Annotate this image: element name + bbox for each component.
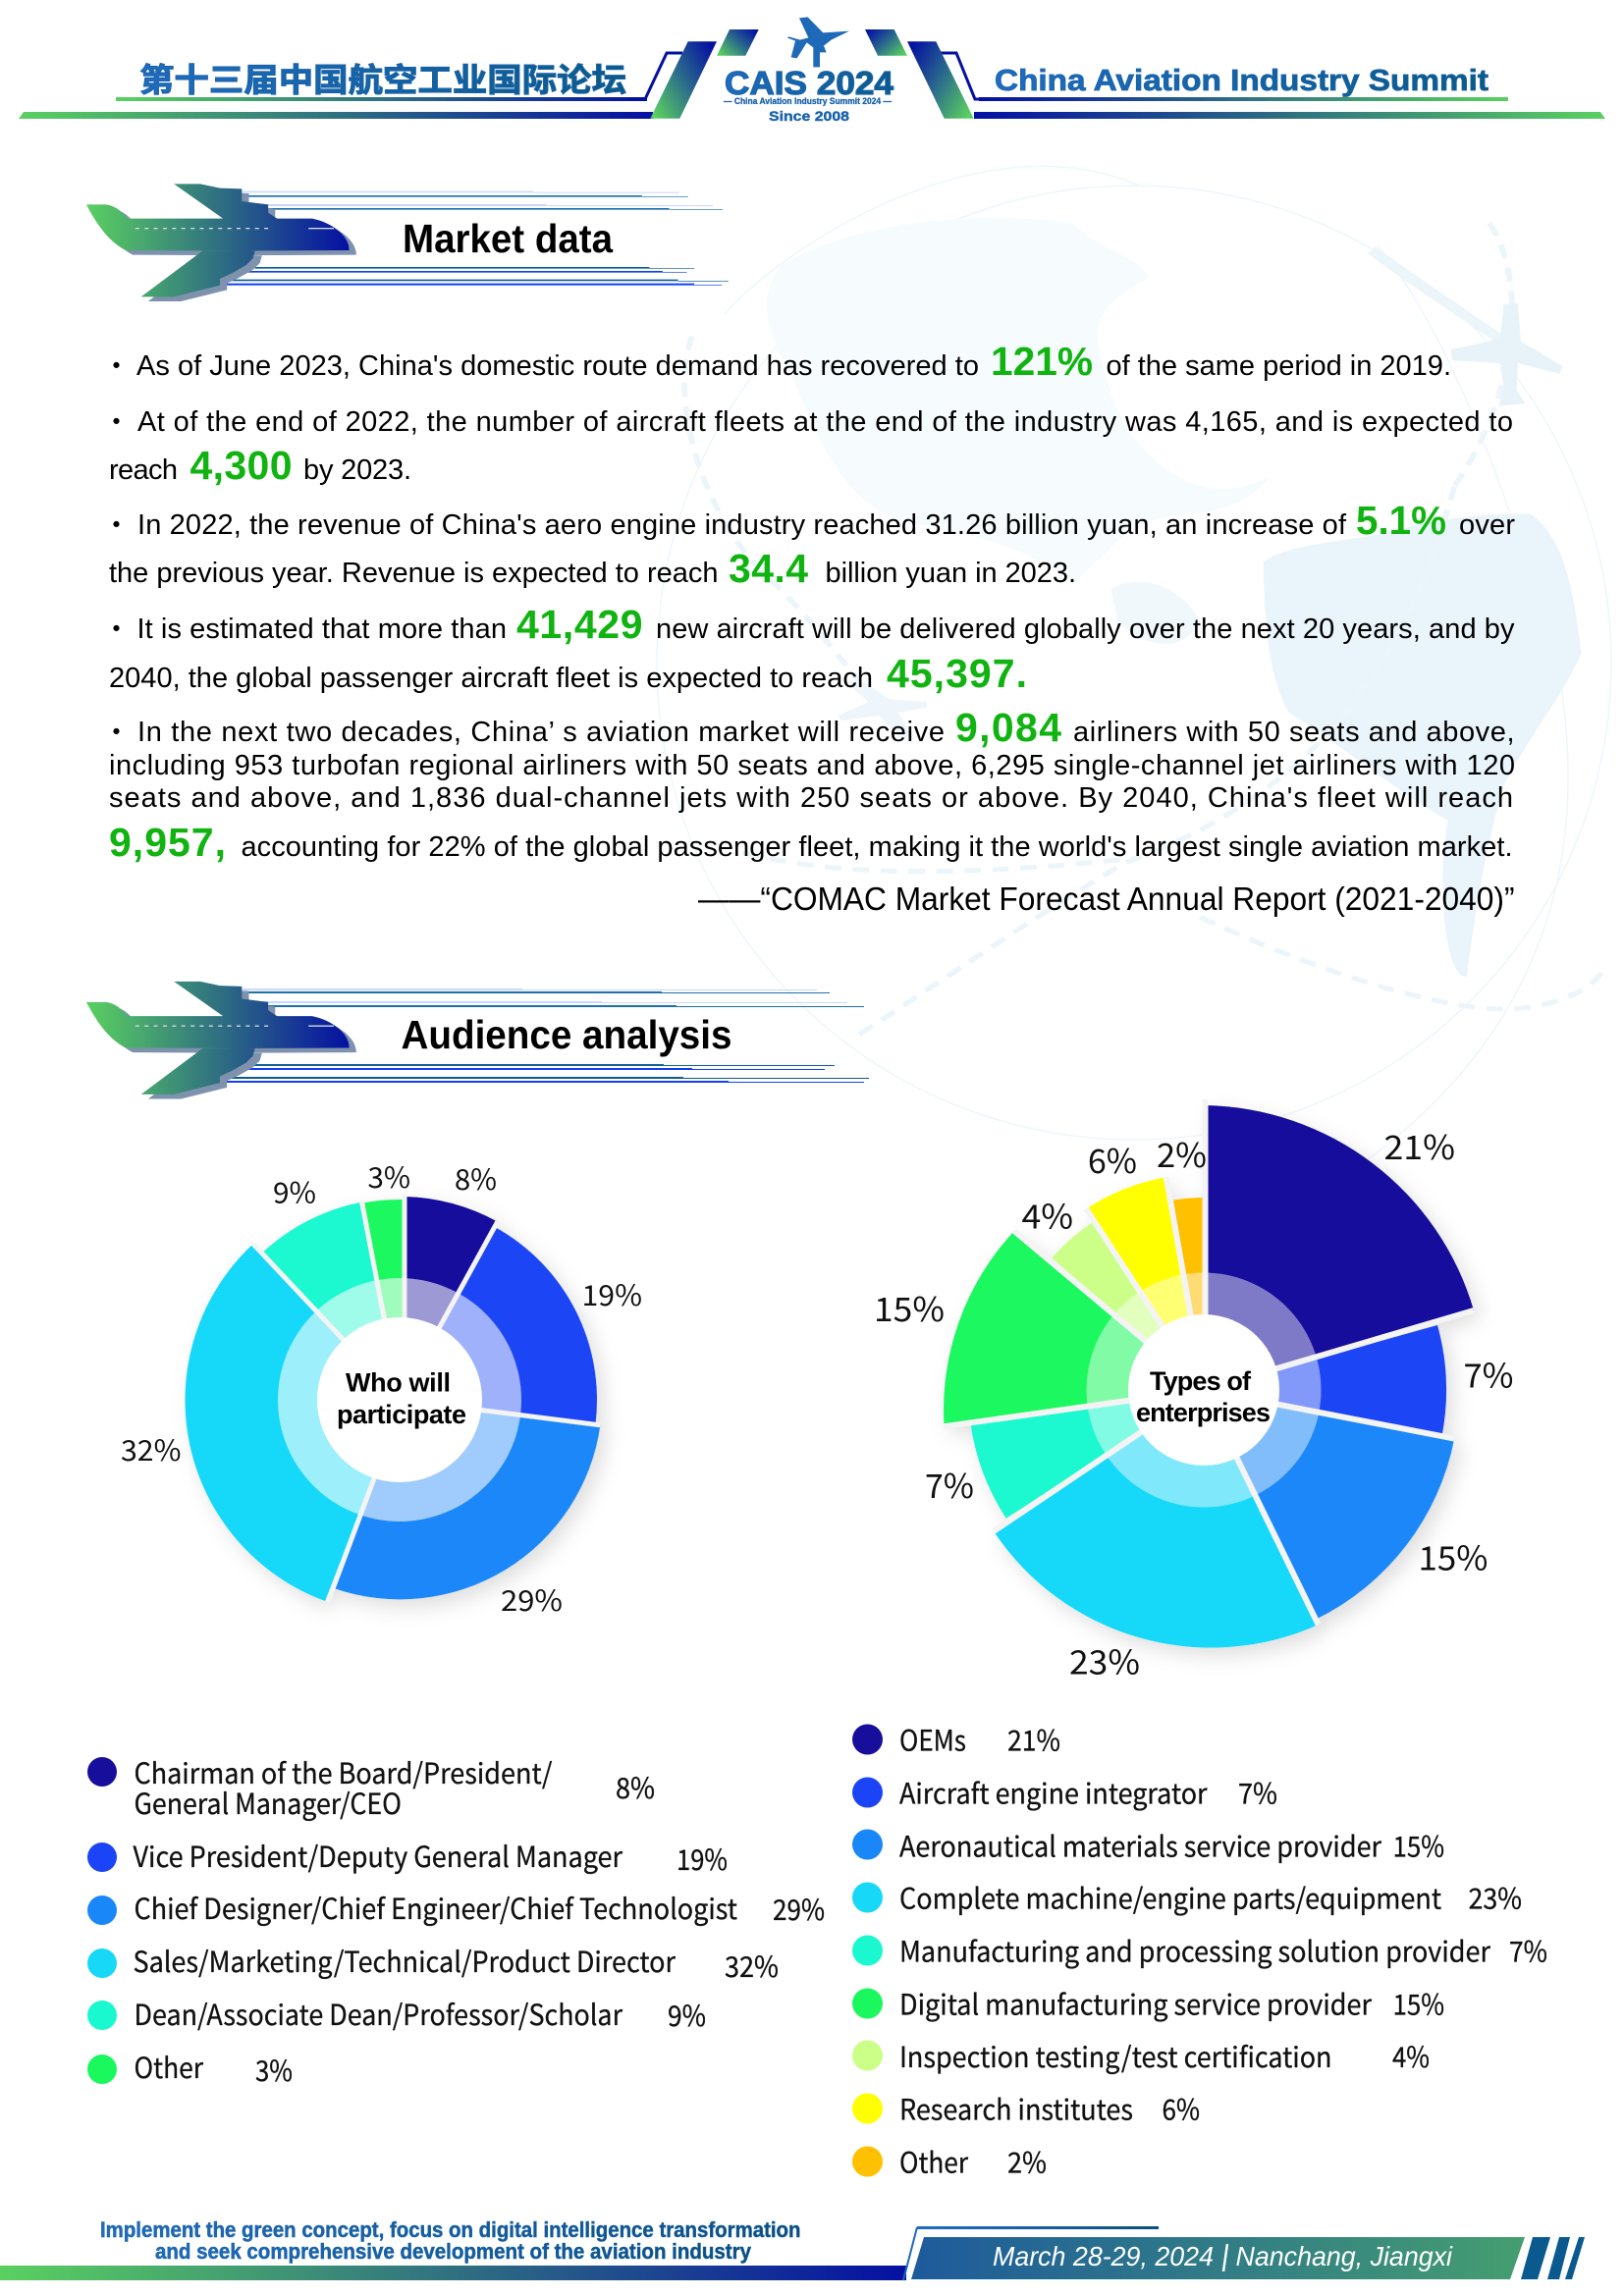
- legend: who will participate: [87, 1751, 825, 2090]
- data labels: 32%: [121, 1428, 181, 1469]
- legend: who will participate: 9%: [668, 1994, 706, 2035]
- bullet 2: reach: [109, 454, 178, 486]
- legend: types of enterprises: Aeronautical materials service provider: [899, 1824, 1382, 1865]
- bullet 3: ・: [102, 503, 131, 544]
- bullet 1: of the same period in 2019.: [1106, 350, 1451, 382]
- bullet 5: accounting for 22% of the global passenger fleet, making it the world's largest single aviation market.: [242, 831, 1512, 863]
- data labels: 23%: [1069, 1635, 1140, 1684]
- bullet 2: [102, 400, 1513, 488]
- footer: gradient band: [0, 2266, 906, 2280]
- center label: [337, 1368, 466, 1429]
- legend: who will participate: 3%: [255, 2049, 293, 2090]
- legend: types of enterprises: 7%: [1238, 1771, 1277, 1812]
- data labels: 8%: [455, 1157, 497, 1199]
- logo: CAIS 2024: CAIS 2024: [725, 65, 894, 101]
- bullet 3: 34.4: [729, 546, 808, 591]
- legend: types of enterprises: 2%: [1007, 2140, 1047, 2181]
- bullet 5: seats and above, and 1,836 dual-channel jets with 250 seats or above. By 2040, China's fleet will reach: [109, 782, 1513, 814]
- header banner: [19, 17, 1605, 124]
- market data text block: [102, 339, 1515, 917]
- bullet 3: [102, 498, 1515, 591]
- data labels: 3%: [367, 1155, 410, 1197]
- legend: types of enterprises: Complete machine/engine parts/equipment: [899, 1877, 1441, 1918]
- header: Chinese title: 第十三届中国航空工业国际论坛: [139, 62, 626, 98]
- icon: plane with speed lines: [86, 184, 729, 301]
- legend: who will participate: Chairman of the Board/President/: [134, 1751, 552, 1792]
- pie slices: [944, 1105, 1474, 1648]
- legend: who will participate: 8%: [616, 1766, 655, 1807]
- bullet 5: In the next two decades, China’ s aviation market will receive: [137, 717, 945, 748]
- icon: plane with speed lines: [86, 982, 869, 1098]
- data labels: 4%: [1021, 1190, 1073, 1239]
- legend: types of enterprises: [852, 1718, 1547, 2181]
- data labels: 19%: [581, 1273, 642, 1314]
- bullet 4: new aircraft will be delivered globally over the next 20 years, and by: [656, 614, 1515, 645]
- bullet 3: the previous year. Revenue is expected to reach: [109, 558, 719, 589]
- bullet 5: ・: [102, 710, 131, 751]
- legend: who will participate: Dean/Associate Dean/Professor/Scholar: [134, 1993, 623, 2034]
- header: right gradient band: [974, 112, 1605, 119]
- legend: types of enterprises: Other: [899, 2140, 969, 2181]
- bullet 1: ・: [102, 344, 131, 385]
- legend: who will participate: 29%: [773, 1888, 825, 1929]
- data labels: 7%: [925, 1460, 974, 1508]
- bullet 4: [102, 602, 1515, 696]
- footer: date and location: [993, 2241, 1453, 2271]
- legend: who will participate: General Manager/CEO: [134, 1782, 402, 1823]
- legend: who will participate: Vice President/Deputy General Manager: [134, 1835, 623, 1876]
- legend: types of enterprises: 15%: [1392, 1983, 1444, 2024]
- data labels: 7%: [1463, 1349, 1514, 1398]
- footer: slogan: Implement the green concept, focus on digital intelligence transformation: [100, 2217, 801, 2242]
- logo: subtitle: — China Aviation Industry Summit 2024 —: [724, 96, 892, 106]
- heading text: Market data: [403, 216, 614, 261]
- bullet 4: It is estimated that more than: [137, 614, 507, 645]
- bullet 2: by 2023.: [303, 454, 411, 486]
- bullet 5: 9,957,: [109, 820, 226, 865]
- legend: types of enterprises: 23%: [1469, 1877, 1522, 1918]
- legend: types of enterprises: Manufacturing and processing solution provider: [899, 1930, 1491, 1971]
- legend: who will participate: Other: [134, 2046, 204, 2087]
- data labels: 2%: [1157, 1129, 1207, 1177]
- data labels: 15%: [874, 1283, 945, 1331]
- bullet 2: At of the end of 2022, the number of aircraft fleets at the end of the industry was 4,165, and is expected to: [137, 406, 1513, 438]
- header: left gradient band: [19, 112, 653, 119]
- legend: who will participate: 19%: [677, 1838, 728, 1879]
- legend: types of enterprises: OEMs: [899, 1718, 966, 1759]
- bullet 2: 4,300: [190, 443, 293, 488]
- footer banner: [0, 2217, 1585, 2280]
- center label: participate: [337, 1400, 466, 1429]
- legend: types of enterprises: 21%: [1007, 1718, 1060, 1759]
- source citation: ——“COMAC Market Forecast Annual Report (2021-2040)”: [698, 881, 1514, 917]
- bullet 4: 2040, the global passenger aircraft fleet is expected to reach: [109, 663, 873, 694]
- donut slices: [186, 1197, 600, 1601]
- header: English title: China Aviation Industry Summit: [995, 63, 1489, 97]
- bullet 5: including 953 turbofan regional airliners with 50 seats and above, 6,295 single-channel jet airliners with 120: [109, 750, 1515, 781]
- logo: airplane icon: [787, 17, 849, 67]
- bullet 2: ・: [102, 400, 131, 441]
- legend: types of enterprises: 6%: [1163, 2087, 1200, 2128]
- center label: [1136, 1366, 1271, 1427]
- data labels: 21%: [1384, 1121, 1455, 1169]
- footer: slogan: and seek comprehensive development of the aviation industry: [155, 2239, 752, 2264]
- footer: slogan: [100, 2217, 801, 2264]
- bullet 3: over: [1459, 509, 1515, 541]
- heading text: Audience analysis: [401, 1012, 732, 1057]
- bullet 1: [102, 339, 1451, 385]
- legend: who will participate: Chief Designer/Chief Engineer/Chief Technologist: [134, 1887, 737, 1928]
- center label: Types of: [1150, 1366, 1252, 1396]
- section heading: Market data: [86, 184, 729, 301]
- bullet 3: 5.1%: [1356, 498, 1446, 543]
- legend: types of enterprises: Aircraft engine integrator: [899, 1771, 1208, 1812]
- data labels: [121, 1155, 642, 1620]
- bullet 3: billion yuan in 2023.: [825, 558, 1076, 589]
- section heading: Audience analysis: [86, 982, 869, 1098]
- data labels: 6%: [1088, 1135, 1137, 1183]
- footer: date and location: Nanchang, Jiangxi: [1235, 2241, 1453, 2271]
- bullet 1: 121%: [991, 339, 1093, 384]
- bullet 3: In 2022, the revenue of China's aero engine industry reached 31.26 billion yuan, an increase of: [137, 509, 1347, 541]
- legend: who will participate: 32%: [725, 1945, 779, 1986]
- chart: who will participate: [121, 1155, 642, 1620]
- bullet 5: 9,084: [955, 705, 1061, 750]
- data labels: 9%: [273, 1170, 316, 1211]
- bullet 4: 41,429: [516, 602, 642, 647]
- bullet 5: airliners with 50 seats and above,: [1073, 717, 1514, 748]
- data labels: 29%: [501, 1578, 563, 1620]
- legend: types of enterprises: Digital manufacturing service provider: [899, 1983, 1373, 2024]
- bullet 4: ・: [102, 607, 131, 648]
- legend: types of enterprises: 4%: [1392, 2035, 1430, 2076]
- legend: types of enterprises: 7%: [1509, 1930, 1547, 1971]
- center label: enterprises: [1136, 1398, 1271, 1427]
- logo: since: Since 2008: [769, 109, 850, 124]
- bullet 4: 45,397.: [887, 651, 1027, 696]
- bullet 1: As of June 2023, China's domestic route demand has recovered to: [136, 350, 979, 382]
- data labels: 15%: [1418, 1531, 1489, 1580]
- legend: types of enterprises: Inspection testing/test certification: [899, 2035, 1331, 2076]
- legend: types of enterprises: 15%: [1392, 1824, 1444, 1865]
- legend: who will participate: Sales/Marketing/Technical/Product Director: [134, 1940, 677, 1981]
- footer: date and location: March 28-29, 2024: [993, 2241, 1214, 2271]
- data labels: [874, 1121, 1514, 1684]
- legend: types of enterprises: Research institutes: [899, 2087, 1133, 2128]
- center label: Who will: [346, 1368, 451, 1398]
- chart: types of enterprises: [874, 1099, 1514, 1684]
- bullet 5: [102, 705, 1515, 865]
